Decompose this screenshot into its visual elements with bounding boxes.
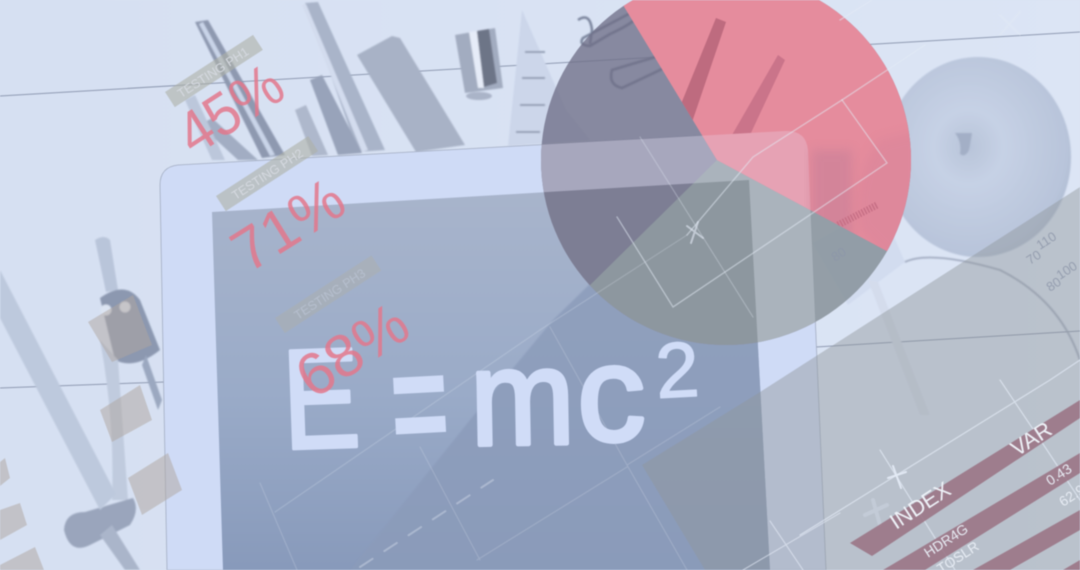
text: equation E = mc squared: m: [469, 320, 576, 474]
icon: triangular ruler: [508, 10, 590, 146]
label band: testing ph3: TESTING PH3: [292, 266, 368, 322]
pie red slice: [623, 0, 912, 252]
icon: pencils on the desk: [185, 2, 385, 160]
label band: testing ph2: [216, 136, 318, 211]
stat: 45 percent: 45%: [165, 51, 296, 168]
text: equation E = mc squared: =: [386, 319, 453, 489]
pie slice over bezel: [540, 135, 816, 342]
icon: paper clips: [578, 8, 675, 88]
icon: pencil sharpener: [455, 28, 503, 100]
panel: tablet: [160, 131, 826, 570]
icon: drawing compass: [64, 237, 162, 570]
pie grey overlay wedge: [590, 161, 886, 345]
chart: faint darker diagonal area on the screen: [446, 285, 760, 462]
icon: eraser: [357, 36, 465, 152]
protractor numbers: 70: [1023, 247, 1044, 268]
protractor numbers: [828, 229, 1080, 295]
table header band: [850, 400, 1080, 556]
chart: grey diagonal overlay: [642, 187, 1080, 570]
chart: pie circle: [540, 0, 912, 346]
text: equation E = mc squared: [279, 317, 701, 489]
protractor numbers: 80: [828, 244, 849, 265]
thin white guide lines: [260, 0, 1080, 570]
icon: long pencil at left: [0, 270, 116, 510]
stat: 68 percent: 68%: [284, 289, 421, 411]
label band: testing ph1: [165, 35, 263, 107]
table cell: 0.43: 0.43: [1043, 460, 1075, 489]
table row band two: [973, 510, 1080, 570]
labels: faint percent bar stripes at left: [0, 295, 182, 570]
pie slice over screen: [544, 180, 758, 346]
table header: index: INDEX: [885, 476, 955, 534]
text: equation E = mc squared: 2: [653, 325, 701, 415]
label band: testing ph1: TESTING PH1: [175, 44, 251, 101]
label band: testing ph3: [275, 255, 381, 333]
table row band one: [883, 453, 1080, 570]
protractor numbers: 100: [1053, 258, 1080, 283]
text: equation E = mc squared: E: [279, 317, 363, 480]
table cell: hdr4g: HDR4G: [921, 520, 971, 561]
text: equation E = mc squared: c: [576, 317, 646, 470]
stat: 71 percent: 71%: [219, 165, 357, 285]
icon: apple: [885, 57, 1071, 257]
tablet bezel: [160, 131, 826, 570]
table header: var: VAR: [1006, 416, 1056, 461]
tablet screen: [212, 180, 770, 570]
pie dark slice over desk: [541, 6, 888, 322]
protractor numbers: 110: [1033, 229, 1059, 253]
icon: ruler and protractor at right: [812, 205, 1080, 415]
protractor numbers: 80: [1043, 274, 1064, 295]
label band: testing ph2: TESTING PH2: [229, 146, 306, 203]
table: index var: [850, 400, 1080, 570]
